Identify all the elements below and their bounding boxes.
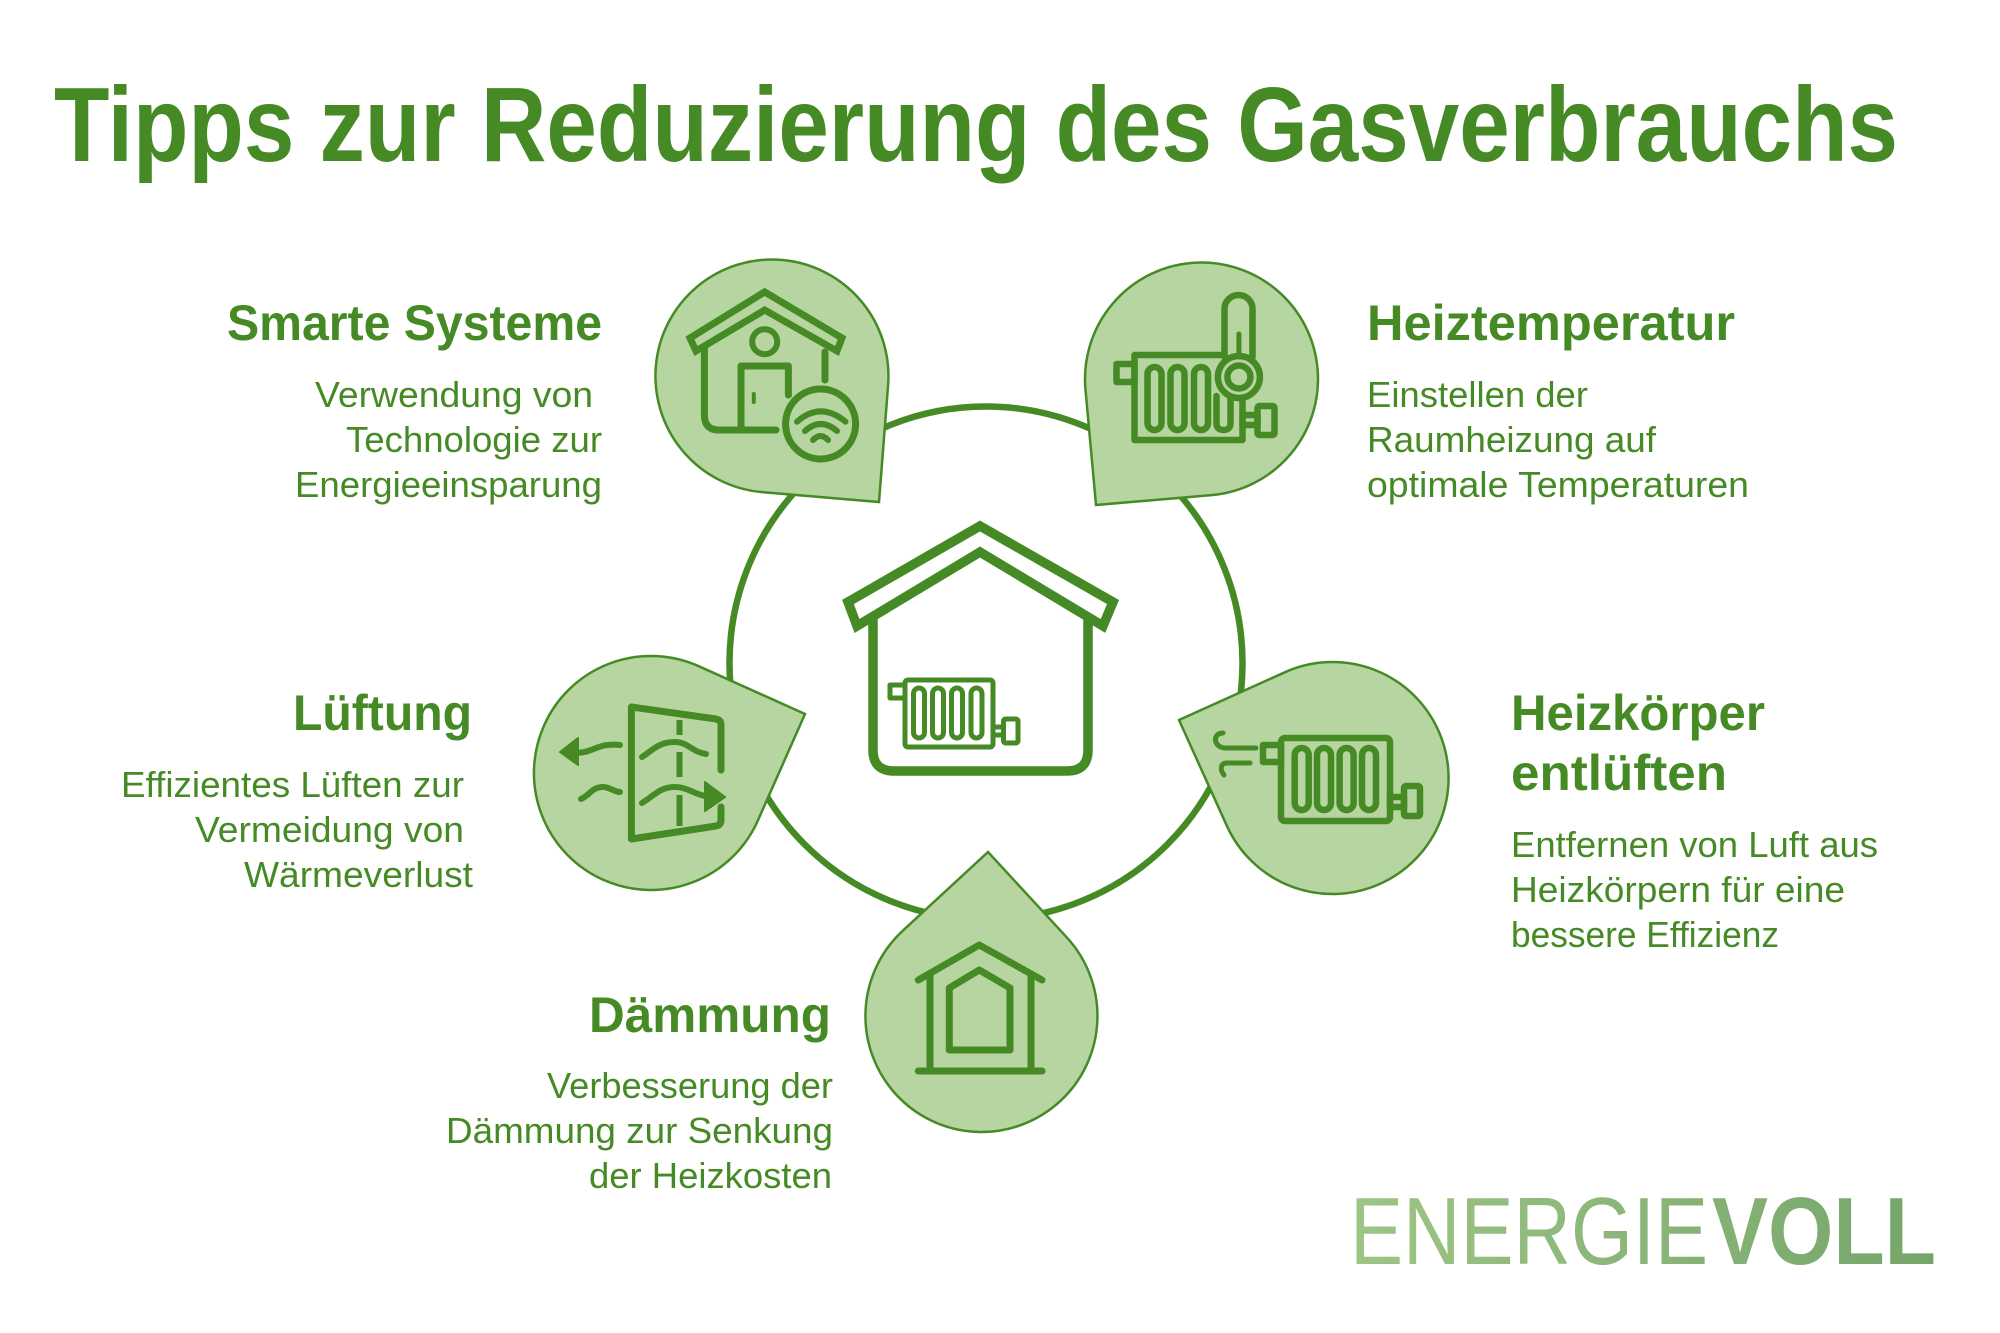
panel: Dämmung [446, 852, 1097, 1196]
heading: Lüftung [293, 685, 472, 741]
description [295, 374, 602, 505]
panel: Heiztemperatur [1085, 263, 1749, 505]
icon: insulated house [918, 945, 1042, 1071]
icon: radiator bleeding [1215, 733, 1420, 821]
description: Entfernen von Luft aus [1511, 824, 1878, 865]
heading [1511, 685, 1765, 801]
description: Verwendung von [315, 374, 593, 415]
panel: Lüftung [121, 656, 805, 895]
heading: entlüften [1511, 745, 1727, 801]
heading: Smarte Systeme [227, 295, 602, 351]
description: Technologie zur [346, 419, 602, 460]
icon: window ventilation [560, 707, 725, 839]
radiator in house [890, 680, 1018, 747]
heading: Dämmung [589, 987, 831, 1043]
panel: Smarte Systeme [227, 260, 888, 505]
description: Raumheizung auf [1367, 419, 1657, 460]
description: optimale Temperaturen [1367, 464, 1749, 505]
pin [534, 656, 805, 890]
description [446, 1065, 833, 1196]
central house icon [848, 526, 1113, 771]
logo: ENERGIE [1350, 1178, 1708, 1285]
description [1367, 374, 1749, 505]
panel: Heizkörper entlüften [1179, 662, 1878, 955]
description [1511, 824, 1878, 955]
description: Heizkörpern für eine [1511, 869, 1845, 910]
icon: smart home [690, 292, 856, 459]
icon: radiator with thermometer [1116, 295, 1274, 440]
description: bessere Effizienz [1511, 914, 1779, 955]
pin [1179, 662, 1449, 894]
description: Verbesserung der [547, 1065, 833, 1106]
logo: VOLL [1712, 1178, 1936, 1285]
description: Wärmeverlust [244, 854, 473, 895]
pin [1085, 263, 1318, 505]
pin [655, 260, 888, 502]
heading: Heiztemperatur [1367, 295, 1735, 351]
description: Vermeidung von [195, 809, 464, 850]
description: Energieeinsparung [295, 464, 602, 505]
heading: Heizkörper [1511, 685, 1765, 741]
description: der Heizkosten [589, 1155, 832, 1196]
connecting ring [730, 406, 1242, 920]
description [121, 764, 473, 895]
description: Dämmung zur Senkung [446, 1110, 833, 1151]
description: Effizientes Lüften zur [121, 764, 464, 805]
description: Einstellen der [1367, 374, 1588, 415]
pin [865, 852, 1097, 1132]
